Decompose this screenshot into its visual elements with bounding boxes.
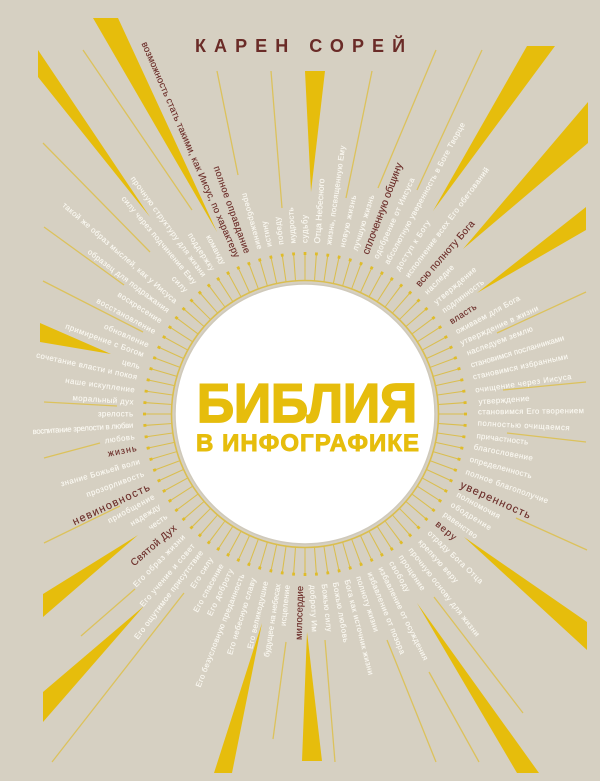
radial labels: left half: Его ощутимое присутствие xyxy=(132,549,205,641)
radial labels: left half: примирение с Богом xyxy=(64,322,145,359)
radial labels: right half: отраду Бога Отца xyxy=(426,529,485,586)
central white circle xyxy=(175,284,435,544)
radial labels: left half: прочную структуру для жизни xyxy=(129,175,208,278)
radial labels: left half xyxy=(32,40,306,688)
radial labels: left half: моральный дух xyxy=(72,393,134,406)
radial labels: left half: Его небесную славу xyxy=(225,577,258,656)
radial labels: right half: ободрение xyxy=(449,500,493,532)
radial labels: right half: исполнение всех Его обетований xyxy=(403,166,491,279)
keyword: возможность стать такими: возможность стать такими, как Иисус, по характеру xyxy=(139,40,242,260)
radial labels: left half: Его спасение xyxy=(191,562,226,614)
radial labels: left half: честь xyxy=(147,512,169,532)
keyword: невиновность: невиновность xyxy=(71,482,152,528)
radial labels: right half: полномочия xyxy=(455,490,502,521)
radial labels: left half: силу через подчинение Ему xyxy=(120,194,199,286)
radial labels: right half: Божью силу xyxy=(320,583,334,632)
ray: lower left xyxy=(43,535,138,617)
radial labels: left half: поддержку xyxy=(186,231,217,272)
ray: lower right xyxy=(464,537,587,650)
radial labels: right half: утверждение xyxy=(478,394,530,406)
radial labels: right half: становимся избранными xyxy=(472,352,569,381)
radial labels: right half: одобрение от Иисуса xyxy=(372,176,417,260)
radial labels: left half: преображение xyxy=(240,192,264,250)
ray: bottom right xyxy=(417,603,539,773)
radial labels: right half: утверждение xyxy=(432,265,478,306)
radial labels: left half: цель xyxy=(121,357,141,371)
radial labels: right half: мудрость xyxy=(286,207,298,244)
radial labels: right half: определенность xyxy=(469,455,533,480)
radial labels: right half: утверждение в жизни xyxy=(459,304,540,347)
ray: top left xyxy=(93,18,217,232)
radial labels: right half: Божью любовь xyxy=(331,582,351,643)
radial labels: right half: избавление от осуждения xyxy=(376,565,430,662)
keyword: всю полноту Бога: всю полноту Бога xyxy=(414,219,478,289)
radial labels: right half: победу xyxy=(273,216,286,245)
radial labels: left half: воскресение xyxy=(116,290,164,325)
radial labels: right half: избавление от позора xyxy=(365,571,407,656)
radial labels: right half: полное благополучие xyxy=(464,467,549,505)
keyword: веру: веру xyxy=(433,519,459,543)
radial labels: left half: команду xyxy=(204,233,227,266)
radial labels: right half: становимся Его творением xyxy=(478,406,584,416)
ray: left xyxy=(40,323,111,354)
ray: top xyxy=(305,71,325,192)
radial labels: left half: Его учение и совет xyxy=(138,542,197,609)
radial labels: right half: судьбу xyxy=(300,215,310,243)
keyword: полное оправдание: полное оправдание xyxy=(211,165,252,255)
radial labels: right half: подлинность xyxy=(440,278,486,315)
radial labels: right half: новую жизнь xyxy=(338,194,358,248)
radial labels: left half: Его образ жизни xyxy=(131,533,187,589)
radial labels: right half: абсолютную уверенность в Боге Творце xyxy=(383,121,467,266)
radial labels: left half: любовь xyxy=(104,432,135,445)
keyword: милосердие: милосердие xyxy=(294,586,306,640)
radial labels: right half: причастность xyxy=(476,431,529,447)
radial labels: right half: Отца Небесного xyxy=(312,178,326,244)
sunburst ticks around the circle xyxy=(144,254,466,574)
radial labels: left half: Его доброту xyxy=(205,567,235,617)
radial labels: right half: доступ к Богу xyxy=(393,219,432,272)
subtitle: В ИНФОГРАФИКЕ xyxy=(196,430,419,457)
radial labels: right half: полностью очищаемся xyxy=(478,419,570,432)
ray: bottom left xyxy=(214,623,262,773)
radial labels: left half: силу xyxy=(170,274,190,294)
keyword: сплоченную общину: сплоченную общину xyxy=(360,160,406,256)
radial labels: right half: наследуем землю xyxy=(465,324,534,357)
radial labels: left half: Его великодушие xyxy=(246,580,270,650)
ray: far top left xyxy=(38,50,150,217)
radial labels: right half: благословение xyxy=(473,442,534,463)
radial labels: left half: исцеление xyxy=(279,585,292,626)
main title: БИБЛИЯ xyxy=(197,372,417,434)
radial labels: right half: истину xyxy=(260,220,274,248)
author name: КАРЕН СОРЕЙ xyxy=(195,35,405,56)
radial labels: right half: крепкую веру xyxy=(417,538,460,585)
radial labels: right half: прощение xyxy=(397,553,427,592)
radial labels: right half: прочную основу для жизни xyxy=(407,546,482,638)
ray: bottom centre xyxy=(302,632,322,761)
radial labels: right half: Бога как источник жизни xyxy=(343,579,375,676)
ray: top right xyxy=(433,46,555,211)
keyword: жизнь: жизнь xyxy=(107,443,138,459)
keyword: власть: власть xyxy=(448,301,478,326)
radial labels: left half: такой же образ мыслей, как у Иисуса xyxy=(61,201,179,306)
radial labels: left half: будущее на небесах xyxy=(262,583,283,658)
radial labels: right half: очищение через Иисуса xyxy=(475,372,573,395)
keyword: уверенность: уверенность xyxy=(458,479,533,522)
radial labels: left half: наше искупление xyxy=(65,376,135,395)
radial labels: left half: зрелость xyxy=(98,410,133,418)
radial labels: left half: воспитание зрелости в любви xyxy=(32,421,134,436)
radial labels: right half xyxy=(260,121,584,676)
radial labels: left half: прозорливость xyxy=(85,469,145,499)
radial labels: right half: свободу xyxy=(387,560,412,594)
radial labels: right half: оживаем для Бога xyxy=(454,293,522,336)
ray: upper right xyxy=(463,102,588,249)
radial labels: right half: наследие xyxy=(423,263,456,296)
radial labels: left half: обновление xyxy=(103,322,150,349)
radial labels: right half: становимся посланниками xyxy=(470,333,565,369)
ray: right xyxy=(477,207,586,293)
radial labels: right half: доброту Им xyxy=(308,585,319,632)
keyword: Святой Дух: Святой Дух xyxy=(129,523,179,569)
radial labels: left half: надежду xyxy=(128,502,162,528)
ray: lower left large xyxy=(43,606,144,722)
radial labels: right half: жизнь, посвященную Ему xyxy=(324,145,347,245)
radial labels: left half: образец для подражания xyxy=(86,247,171,315)
radial labels: left half: Его безусловную преданность xyxy=(194,572,246,688)
radial labels: left half: восстановление xyxy=(95,296,157,336)
radial labels: left half: Его силу xyxy=(188,556,215,590)
radial labels: left half: сочетание власти и покоя xyxy=(35,351,138,381)
radial labels: left half: знание Божьей воли xyxy=(60,457,141,488)
radial labels: right half: лучшую жизнь xyxy=(351,194,376,252)
radial labels: left half: приобщение xyxy=(106,492,156,525)
radial labels: right half: полноту жизни xyxy=(354,575,381,633)
radial labels: right half: равенство xyxy=(441,510,480,541)
